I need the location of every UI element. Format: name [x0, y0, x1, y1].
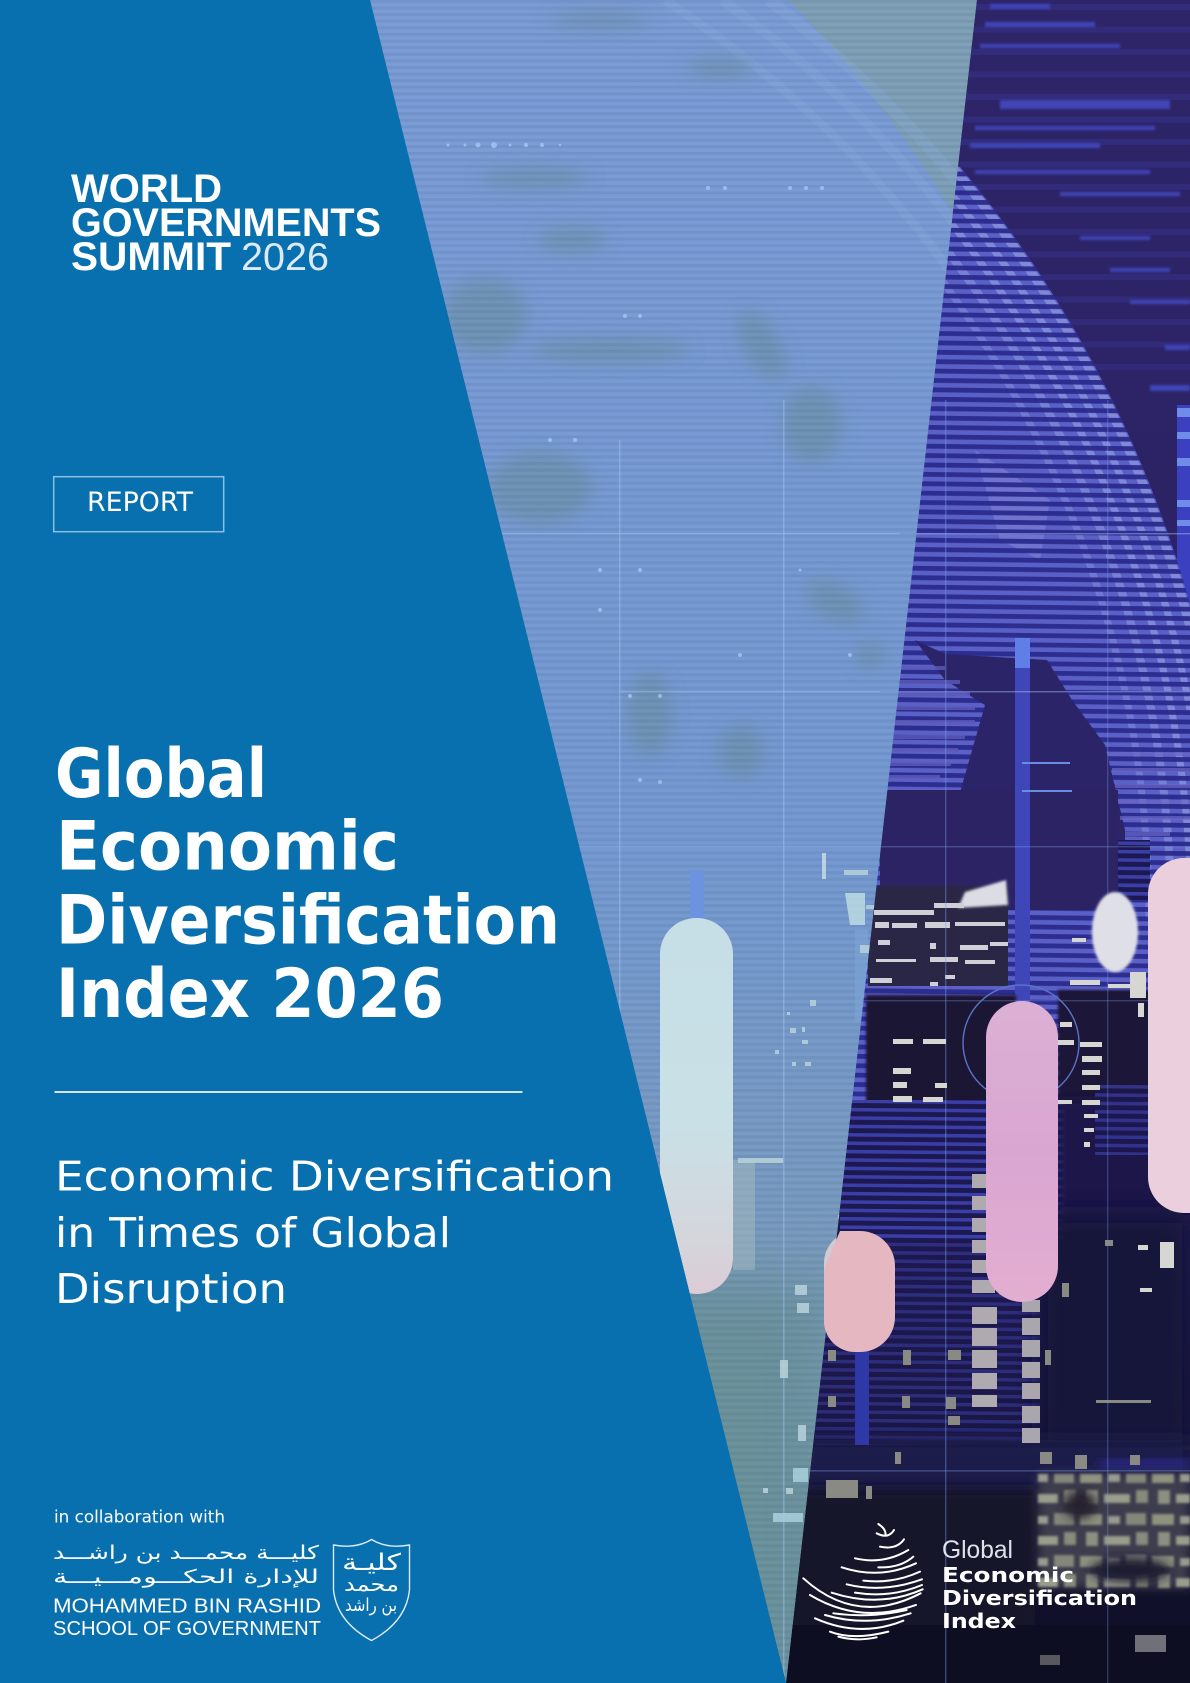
bright wick of pale candle — [690, 870, 704, 920]
panel: translucent triangle overlay — [370, 0, 977, 1683]
subtitle — [55, 1152, 614, 1313]
logo: World Governments Summit 2026: WORLD — [71, 167, 222, 211]
logo: Mohammed Bin Rashid School of Government: للإدارة الحكـــومـــيـــة — [53, 1566, 319, 1588]
logo: Mohammed Bin Rashid School of Government — [53, 1540, 410, 1640]
icon: shield crest: بن راشد — [345, 1595, 397, 1616]
upper tower block — [868, 880, 1008, 986]
title: Index 2026 — [56, 955, 444, 1034]
landmass shadows — [443, 12, 884, 778]
subtitle: Disruption — [55, 1265, 287, 1313]
candlestick: pale pink tall — [1148, 858, 1190, 1213]
logo: Global Economic Diversification Index: Diversification — [942, 1586, 1137, 1610]
logo: Mohammed Bin Rashid School of Government: كليـــة محمـــد بن راشـــد — [53, 1542, 320, 1564]
small pink candlestick edge — [824, 1238, 837, 1324]
icon: shield crest: محمد — [344, 1572, 399, 1596]
title: Global — [55, 735, 267, 814]
dim buildings at the foot — [826, 1174, 1166, 1665]
icon: shield crest — [334, 1540, 410, 1640]
title: Diversification — [56, 882, 560, 960]
logo: Global Economic Diversification Index: Index — [942, 1609, 1016, 1633]
logo: Global Economic Diversification Index — [803, 1524, 1137, 1639]
candlestick: lilac — [986, 1001, 1058, 1302]
pale towers beside candle — [733, 853, 874, 1522]
icon: shield crest: كليـة — [342, 1550, 401, 1576]
subtitle: in Times of Global — [55, 1209, 451, 1257]
blurred white glow — [1092, 892, 1138, 972]
panel: blue left wedge — [0, 0, 786, 1683]
logo: Global Economic Diversification Index: Global — [942, 1536, 1013, 1564]
collaboration credit: in collaboration with — [54, 1508, 225, 1528]
logo: World Governments Summit 2026: SUMMIT — [71, 235, 231, 279]
title — [55, 735, 560, 1034]
logo: Mohammed Bin Rashid School of Government: SCHOOL OF GOVERNMENT — [53, 1618, 321, 1640]
logo: World Governments Summit 2026 — [71, 167, 381, 279]
icon: striped globe — [803, 1524, 923, 1639]
matrix of lit city windows — [1038, 1474, 1190, 1588]
ring around candlestick — [963, 985, 1079, 1101]
subtitle: Economic Diversification — [55, 1152, 614, 1200]
logo: Global Economic Diversification Index: Economic — [942, 1563, 1074, 1587]
label: report tag: REPORT — [87, 487, 193, 518]
dotted data lights — [446, 142, 852, 784]
pale candlestick — [660, 918, 733, 1294]
panel: data-city photo on the right — [370, 0, 1190, 1683]
logo: World Governments Summit 2026: 2026 — [241, 236, 329, 279]
scattered lit windows — [893, 938, 1174, 1292]
candlestick: small pink — [824, 1231, 895, 1352]
label: report tag — [54, 477, 224, 532]
logo: World Governments Summit 2026: GOVERNMENTS — [71, 201, 381, 245]
logo: Mohammed Bin Rashid School of Government: MOHAMMED BIN RASHID — [53, 1595, 321, 1617]
title: Economic — [56, 808, 399, 886]
